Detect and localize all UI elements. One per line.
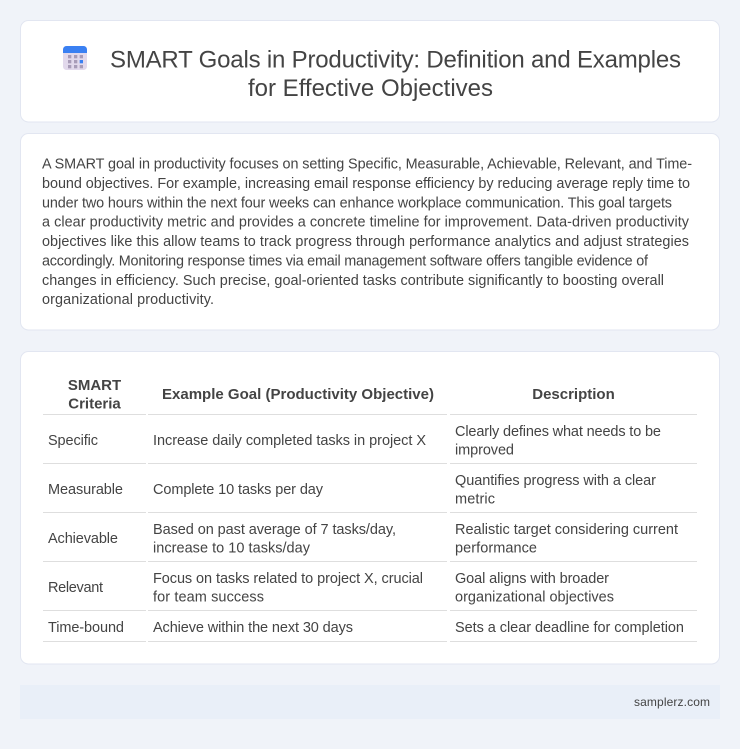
row: Specific: Increase daily completed tasks in project X xyxy=(153,433,426,449)
row: Relevant: Relevant xyxy=(48,580,103,596)
row: Measurable: Measurable xyxy=(48,482,123,498)
row: Relevant: Goal aligns with broader xyxy=(455,571,609,587)
title: for Effective Objectives xyxy=(248,75,493,102)
row: Achievable: Based on past average of 7 tasks/day, xyxy=(153,522,396,538)
row: Achievable: performance xyxy=(455,540,537,556)
row: Relevant xyxy=(48,571,614,606)
row: Measurable: metric xyxy=(455,492,495,508)
text block: summary: bound objectives. For example, increasing email response efficiency by reducing average reply time to xyxy=(42,176,690,192)
table header: Criteria xyxy=(68,396,121,412)
row: Specific: Specific xyxy=(48,433,98,449)
row: Time-bound xyxy=(48,620,684,636)
text block: summary: under two hours within the next four weeks can enhance workplace communication. This goal targets xyxy=(42,196,672,212)
row: Time-bound: Achieve within the next 30 days xyxy=(153,620,353,636)
row: Time-bound: Sets a clear deadline for completion xyxy=(455,620,684,636)
table header: SMART xyxy=(68,377,121,394)
row: Relevant: Focus on tasks related to project X, crucial xyxy=(153,571,423,587)
footer xyxy=(20,685,720,719)
title: SMART Goals in Productivity: Definition and Examples xyxy=(110,46,681,74)
row: Time-bound: Time-bound xyxy=(48,620,124,636)
text block: summary: accordingly. Monitoring response times via email management software offers tangible evidence of xyxy=(42,254,649,270)
text block: summary: organizational productivity. xyxy=(42,292,214,308)
row: Specific: Clearly defines what needs to be xyxy=(455,424,661,440)
row: Specific: improved xyxy=(455,442,514,458)
text block: summary: changes in efficiency. Such precise, goal-oriented tasks contribute significantly to boosting overall xyxy=(42,273,664,289)
row: Relevant: for team success xyxy=(153,590,264,606)
text block: summary: a clear productivity metric and provides a concrete timeline for improvement. Data-driven productivity xyxy=(42,214,690,230)
table header: Example Goal (Productivity Objective) xyxy=(162,386,434,403)
row: Achievable: Achievable xyxy=(48,531,118,547)
table header: Description xyxy=(532,386,615,403)
row: Measurable: Quantifies progress with a clear xyxy=(455,473,656,489)
row: Achievable xyxy=(48,522,678,556)
row: Relevant: organizational objectives xyxy=(455,590,614,606)
text block: summary: objectives like this allow teams to track progress through performance analytics and adjust strategies xyxy=(42,234,689,250)
text block: summary: A SMART goal in productivity focuses on setting Specific, Measurable, Achievable, Relevant, and Time- xyxy=(42,156,692,172)
panel: SMART table xyxy=(20,352,720,664)
row: Achievable: Realistic target considering current xyxy=(455,522,678,538)
row: Measurable xyxy=(48,473,656,508)
title xyxy=(110,46,681,102)
row: Specific xyxy=(48,424,661,458)
table header xyxy=(68,377,615,412)
panel: summary paragraph xyxy=(20,134,720,330)
footer source: samplerz.com xyxy=(634,695,710,709)
text block: summary xyxy=(42,156,692,308)
icon: calendar xyxy=(63,46,87,70)
row: Measurable: Complete 10 tasks per day xyxy=(153,482,324,498)
row: Achievable: increase to 10 tasks/day xyxy=(153,540,311,556)
panel: header xyxy=(20,20,720,122)
